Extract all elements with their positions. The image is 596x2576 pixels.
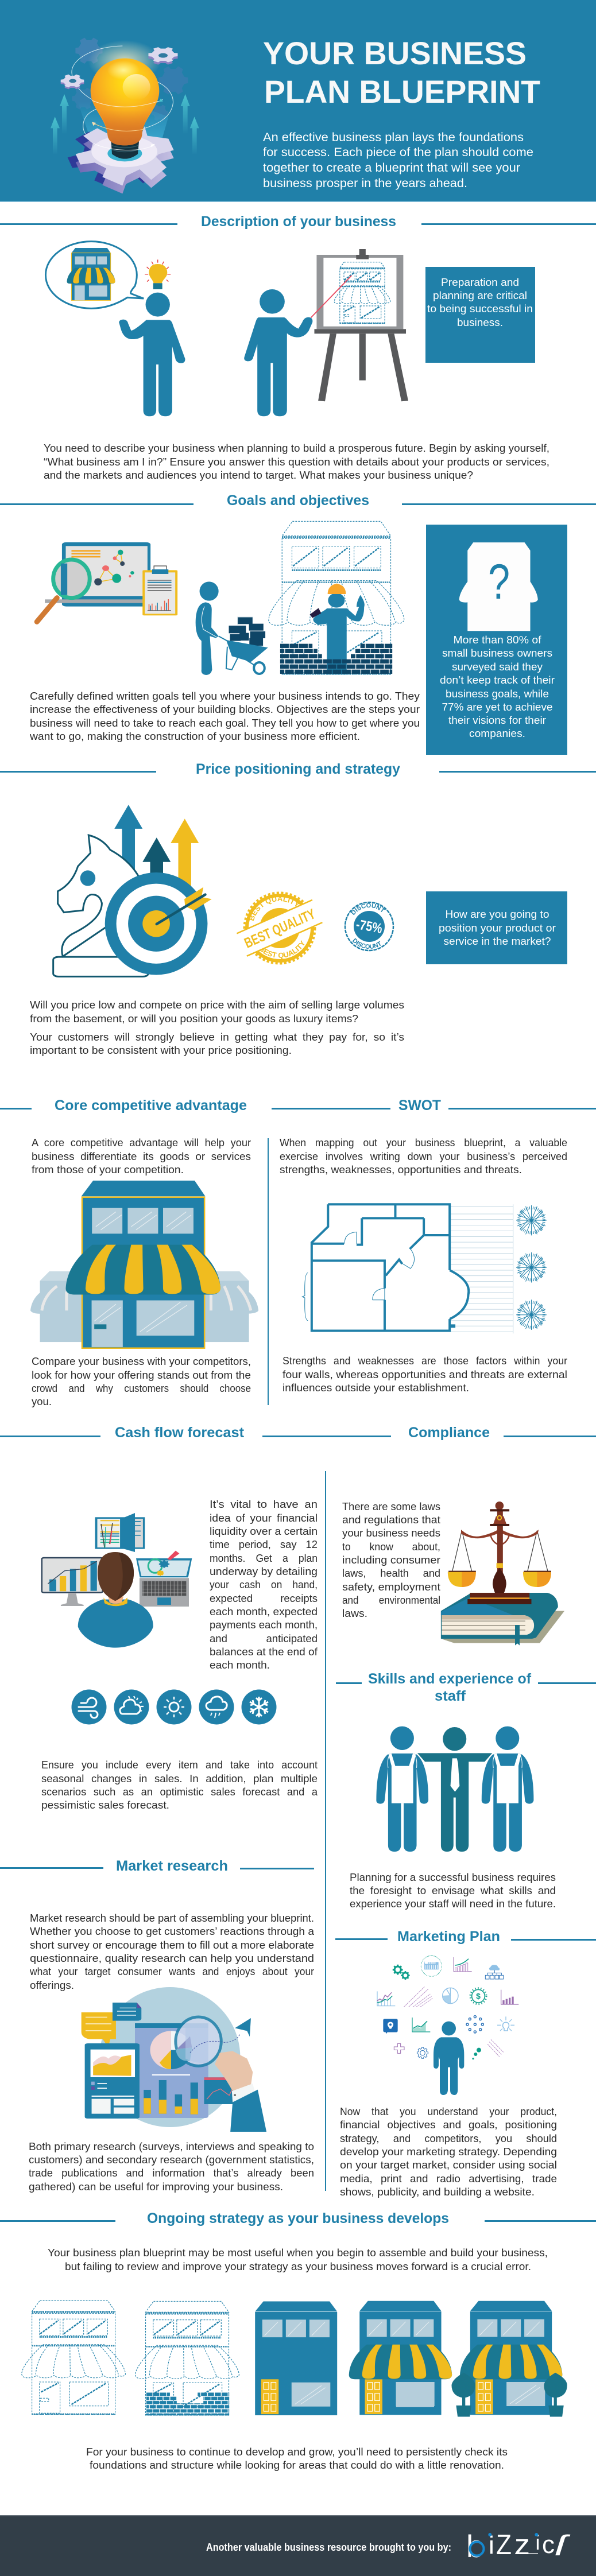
text: anticipated — [266, 1632, 318, 1644]
closing text — [86, 2446, 508, 2471]
icon: area chart — [412, 2018, 430, 2032]
closing text: foundations and structure while looking for areas that could do with a little renovation. — [90, 2459, 504, 2471]
section: description of your business — [0, 214, 596, 481]
text: your business needs — [342, 1527, 440, 1539]
text — [342, 1500, 440, 1619]
intro text: exercise involves writing down your business’s perceived — [280, 1150, 567, 1162]
body text: “What business am I in?” Ensure you answer this question with details about your products or services, — [44, 456, 549, 468]
section: goals and objectives — [0, 492, 596, 755]
intro text: business prosper in the years ahead. — [263, 177, 467, 190]
icon: snowflake — [241, 1690, 277, 1724]
illustration: scales of justice on book — [441, 1502, 564, 1646]
text: There are some laws — [342, 1500, 440, 1512]
icon: teal dots — [472, 2048, 481, 2059]
header band — [0, 0, 596, 202]
intro text: but failing to review and improve your strategy as your business moves forward is a crucial error. — [65, 2260, 531, 2272]
section: cash flow forecast — [0, 1425, 391, 1811]
section: compliance — [342, 1425, 596, 1646]
section: market research — [0, 1858, 315, 2193]
body text: from the basement, or will you position your goods as luxury items? — [30, 1012, 358, 1025]
text: seasonal changes in sales. In addition, plan multiple — [41, 1772, 318, 1784]
text: underway by detailing — [210, 1565, 318, 1577]
stage 3: building with door — [255, 2301, 337, 2415]
stage 2: blueprint with foundations — [136, 2301, 239, 2415]
closing text — [282, 1355, 567, 1394]
text: media, print and radio advertising, trade — [340, 2172, 557, 2185]
callout: preparation: to being successful in — [427, 302, 533, 315]
text: each month, expected — [210, 1605, 318, 1617]
intro text: An effective business plan lays the foundations — [263, 131, 524, 144]
text: customers) and secondary research (government statistics, — [29, 2154, 314, 2166]
text: payments each month, — [210, 1619, 318, 1631]
text: your cash on hand, — [210, 1578, 318, 1590]
logo: bizzics — [466, 2528, 571, 2564]
closing text: Strengths and weaknesses are those factors within your — [282, 1355, 567, 1367]
body text: You need to describe your business when planning to build a prosperous future. Begin by asking yourself, — [44, 442, 549, 454]
icon: pie chart — [443, 1988, 458, 2004]
heading: Skills and experience of — [368, 1671, 532, 1687]
stamp: best quality — [237, 892, 323, 964]
section: ongoing strategy — [0, 2210, 596, 2471]
text: questionnaire, quality research can help you understand — [30, 1952, 314, 1964]
text: safety, employment — [342, 1581, 440, 1593]
callout: survey statistic: More than 80% of — [454, 634, 541, 646]
icon: rain cloud — [199, 1690, 234, 1724]
icon: wind — [71, 1690, 107, 1724]
text — [340, 2105, 557, 2198]
logo: bizzics: Z — [496, 2530, 512, 2561]
text: Whether you choose to get customers’ reactions through a — [30, 1925, 315, 1937]
heading: staff — [435, 1688, 466, 1704]
intro text: for success. Each piece of the plan should come — [263, 146, 533, 159]
text — [350, 1871, 556, 1910]
illustration: three staff members — [376, 1727, 533, 1852]
text: months. Get a plan — [210, 1552, 318, 1564]
heading: Marketing Plan — [397, 1929, 500, 1945]
closing text: For your business to continue to develop and grow, you’ll need to persistently check its — [86, 2446, 508, 2458]
icon: dollar gear — [470, 1988, 486, 2004]
icon: white building with question mark: ? — [488, 554, 510, 610]
icon: growth chart — [454, 1957, 472, 1972]
heading — [368, 1671, 532, 1704]
illustration: laptop, builder, blueprint — [37, 521, 404, 675]
section: marketing plan — [335, 1929, 596, 2198]
text: develop your marketing strategy. Depending — [340, 2146, 557, 2158]
callout: survey statistic: business goals, while — [446, 688, 549, 700]
icon: rising arrows — [404, 1987, 432, 2007]
icon: plus — [394, 2043, 404, 2053]
icon: outline gear — [417, 2047, 428, 2058]
heading: Cash flow forecast — [115, 1425, 245, 1441]
icon: network of dots — [466, 2016, 483, 2033]
section: core competitive advantage — [0, 1097, 258, 1407]
stamp: discount: DISCOUNT — [353, 938, 381, 949]
intro text: A core competitive advantage will help your — [32, 1136, 251, 1149]
icon: small arrows — [487, 2039, 504, 2057]
stage 4: building with awning — [349, 2301, 452, 2415]
body text: Will you price low and compete on price with the aim of selling large volumes — [30, 999, 404, 1011]
callout: survey statistic — [426, 525, 567, 755]
intro text: business differentiate its goods or services — [32, 1150, 251, 1162]
icon: location pin tile — [383, 2019, 398, 2034]
body text: Your customers will strongly believe in getting what they pay for, so it’s — [30, 1031, 404, 1043]
body text: want to go, making the construction of your business more efficient. — [29, 730, 360, 742]
icon: white building with question mark — [459, 542, 538, 631]
text: gathered) can be useful for improving your business. — [29, 2181, 283, 2193]
text — [29, 2140, 314, 2193]
text: trade publications and information that’s already been — [29, 2167, 314, 2179]
text: the foresight to envisage what skills and — [350, 1884, 556, 1896]
icon: gears — [393, 1965, 410, 1980]
stage 1: blueprint — [22, 2300, 125, 2414]
callout: survey statistic: companies. — [469, 727, 525, 739]
text: and — [210, 1632, 227, 1644]
callout: preparation — [425, 267, 535, 363]
intro text — [32, 1136, 251, 1176]
text: time period, say 12 — [210, 1538, 318, 1550]
text: It’s vital to have an — [210, 1498, 318, 1510]
footer text: Another valuable business resource brought to you by: — [206, 2542, 451, 2553]
illustration: person at monitor and laptop — [42, 1513, 192, 1648]
title: YOUR BUSINESS — [263, 35, 527, 71]
intro text: When mapping out your business blueprint, a valuable — [280, 1136, 567, 1149]
illustration: analytics with magnifier — [82, 1987, 266, 2132]
text: Now that you understand your product, — [340, 2105, 557, 2117]
callout: positioning question: position your product or — [439, 922, 556, 934]
heading: SWOT — [398, 1097, 441, 1114]
body text: important to be consistent with your price positioning. — [30, 1044, 292, 1056]
callout: positioning question — [426, 891, 567, 964]
callout: survey statistic: 77% are yet to achieve — [442, 701, 552, 713]
text: liquidity over a certain — [210, 1525, 318, 1537]
callout: survey statistic: don’t keep track of their — [440, 674, 555, 686]
figure: person — [434, 2022, 464, 2095]
logo: bizzics: ſ — [555, 2530, 571, 2562]
stage 5: finished shop with trees — [451, 2301, 567, 2416]
text: receipts — [280, 1592, 318, 1604]
text: each month. — [210, 1659, 270, 1671]
heading: Compliance — [408, 1425, 490, 1441]
text: expected — [210, 1592, 253, 1604]
icon: dollar gear: $ — [476, 1992, 481, 2001]
text: laws. — [342, 1607, 367, 1619]
text: pessimistic sales forecast. — [41, 1799, 169, 1811]
heading: Market research — [116, 1858, 228, 1874]
closing text: influences outside your establishment. — [282, 1382, 469, 1394]
callout: positioning question: How are you going to — [446, 908, 549, 920]
callout: preparation: business. — [457, 316, 503, 328]
text: scenarios such as an optimistic sales forecast and a — [41, 1786, 318, 1798]
callout: preparation: planning are critical — [433, 289, 527, 301]
icon: cloud network — [485, 1965, 504, 1979]
icon: line chart — [377, 1991, 395, 2006]
body text: increase the effectiveness of your building blocks. Objectives are the steps your — [30, 703, 420, 715]
heading: Goals and objectives — [227, 492, 369, 509]
intro text — [48, 2247, 548, 2272]
heading: Ongoing strategy as your business develops — [147, 2210, 449, 2226]
callout: survey statistic: small business owners — [442, 647, 552, 659]
text: balances at the end of — [210, 1646, 318, 1658]
hero illustration: light bulb on gear — [51, 38, 199, 193]
title: PLAN BLUEPRINT — [264, 73, 540, 110]
heading: Price positioning and strategy — [196, 761, 400, 777]
footer — [0, 2515, 596, 2576]
intro text — [280, 1136, 567, 1176]
intro text: Your business plan blueprint may be most useful when you begin to assemble and build your business, — [48, 2247, 548, 2259]
text: financial objectives and goals, positioning — [340, 2119, 557, 2131]
closing text: crowd and why customers should choose — [32, 1382, 251, 1394]
stamp: discount: -75% — [355, 917, 384, 937]
logo: bizzics: z — [514, 2530, 530, 2561]
stamp: best quality: BEST QUALITY — [250, 897, 299, 921]
icon: sun behind cloud — [114, 1690, 149, 1724]
closing text: Compare your business with your competitors, — [32, 1355, 251, 1367]
text: idea of your financial — [210, 1512, 318, 1524]
text: shows, publicity, and building a website. — [340, 2186, 535, 2198]
intro text: together to create a blueprint that will see your — [263, 161, 520, 174]
text: short survey or encourage them to fill out a more elaborate — [30, 1939, 314, 1951]
illustration: floor plan with trees — [302, 1204, 547, 1333]
heading: Description of your business — [201, 214, 396, 230]
text: Both primary research (surveys, interviews and speaking to — [29, 2140, 314, 2152]
body text — [29, 690, 420, 742]
illustration: five stages of building a shop — [22, 2300, 567, 2416]
illustration: chess knight, target and arrows — [53, 805, 212, 976]
closing text — [32, 1355, 251, 1407]
stamp: discount: DISCOUNT — [350, 903, 386, 915]
text: and regulations that — [342, 1514, 440, 1526]
icon: bars — [501, 1990, 518, 2004]
section: SWOT — [272, 1097, 596, 1394]
text: Planning for a successful business requires — [350, 1871, 556, 1883]
intro text — [263, 131, 533, 190]
text — [210, 1498, 318, 1671]
stamp: discount — [345, 901, 394, 952]
logo: bizzics: i — [535, 2531, 540, 2554]
stamp: best quality: BEST QUALITY — [242, 906, 318, 952]
text — [41, 1759, 318, 1811]
section: skills and experience of staff — [336, 1671, 596, 1910]
text — [29, 1912, 315, 1991]
callout: preparation: Preparation and — [441, 276, 519, 288]
callout: positioning question: service in the market? — [443, 935, 551, 947]
text: to know about, — [342, 1541, 440, 1553]
closing text: four walls, whereas opportunities and threats are external — [282, 1368, 567, 1380]
body text: business will need to take to reach each goal. They tell you how to get where you — [30, 717, 420, 729]
text: and environmental — [342, 1594, 440, 1606]
body text — [44, 442, 549, 481]
illustration: shop front — [30, 1181, 258, 1348]
logo: bizzics: b — [466, 2528, 484, 2564]
section: price positioning and strategy — [0, 761, 596, 1056]
text: Market research should be part of assembling your blueprint. — [30, 1912, 314, 1924]
body text: Carefully defined written goals tell you where your business intends to go. They — [30, 690, 420, 702]
logo: bizzics: c — [542, 2531, 555, 2559]
icon: sun — [156, 1690, 192, 1724]
text: Ensure you include every item and take into account — [41, 1759, 318, 1771]
text: experience your staff will need in the future. — [350, 1898, 556, 1910]
body text: and the markets and audiences you intend to target. What makes your business unique? — [44, 469, 473, 481]
text: strategy, and competitors, you should — [340, 2132, 557, 2144]
text: laws, health and — [342, 1567, 440, 1579]
text: including consumer — [342, 1554, 440, 1566]
illustration: person with marketing icons — [377, 1956, 518, 2095]
icon: light bulb with rays — [497, 2016, 514, 2031]
closing text: you. — [32, 1395, 52, 1407]
logo: bizzics: i — [489, 2531, 494, 2559]
icon: factory in dotted circle — [421, 1956, 442, 1976]
intro text: strengths, weaknesses, opportunities and threats. — [280, 1163, 522, 1176]
icons: seasonal weather — [71, 1690, 277, 1724]
text: on your target market, consider using social — [340, 2159, 557, 2171]
closing text: look for how your offering stands out from the — [32, 1369, 251, 1381]
text: what your target consumer wants and enjoys about your — [29, 1965, 314, 1977]
callout: survey statistic: their visions for their — [448, 714, 546, 726]
illustration: person imagining shop, person presenting blueprint — [45, 242, 408, 416]
text: offerings. — [30, 1979, 74, 1991]
heading: Core competitive advantage — [55, 1097, 247, 1114]
stamp: best quality: BEST QUALITY — [261, 940, 304, 959]
callout: survey statistic: surveyed said they — [452, 661, 543, 673]
intro text: from those of your competition. — [32, 1163, 184, 1176]
title — [263, 35, 540, 110]
body text — [30, 999, 404, 1056]
